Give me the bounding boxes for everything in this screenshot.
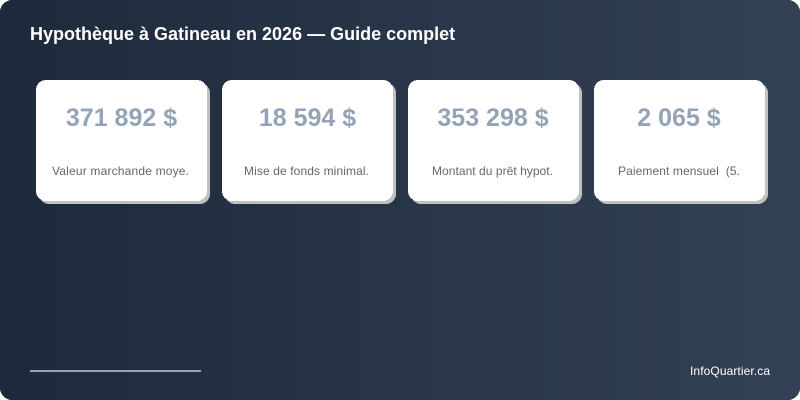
panel: paiement mensuel: [594, 80, 768, 204]
footer accent line: [30, 370, 201, 372]
label: paiement mensuel: Paiement mensuel (5.: [618, 164, 740, 178]
label: valeur marchande: Valeur marchande moye.: [52, 164, 189, 178]
panel: valeur marchande: [36, 80, 210, 204]
number: paiement mensuel: 2 065 $: [637, 104, 721, 132]
panel: mise de fonds: [222, 80, 396, 204]
number: montant du prêt: 353 298 $: [437, 104, 549, 132]
label: montant du prêt: Montant du prêt hypot.: [432, 164, 553, 178]
panel: montant du prêt: [408, 80, 582, 204]
number: mise de fonds: 18 594 $: [259, 104, 356, 132]
number: valeur marchande: 371 892 $: [66, 104, 177, 132]
footer brand: InfoQuartier.ca: [690, 364, 770, 378]
title: Hypothèque à Gatineau en 2026 — Guide complet: [30, 24, 455, 44]
label: mise de fonds: Mise de fonds minimal.: [244, 164, 369, 178]
